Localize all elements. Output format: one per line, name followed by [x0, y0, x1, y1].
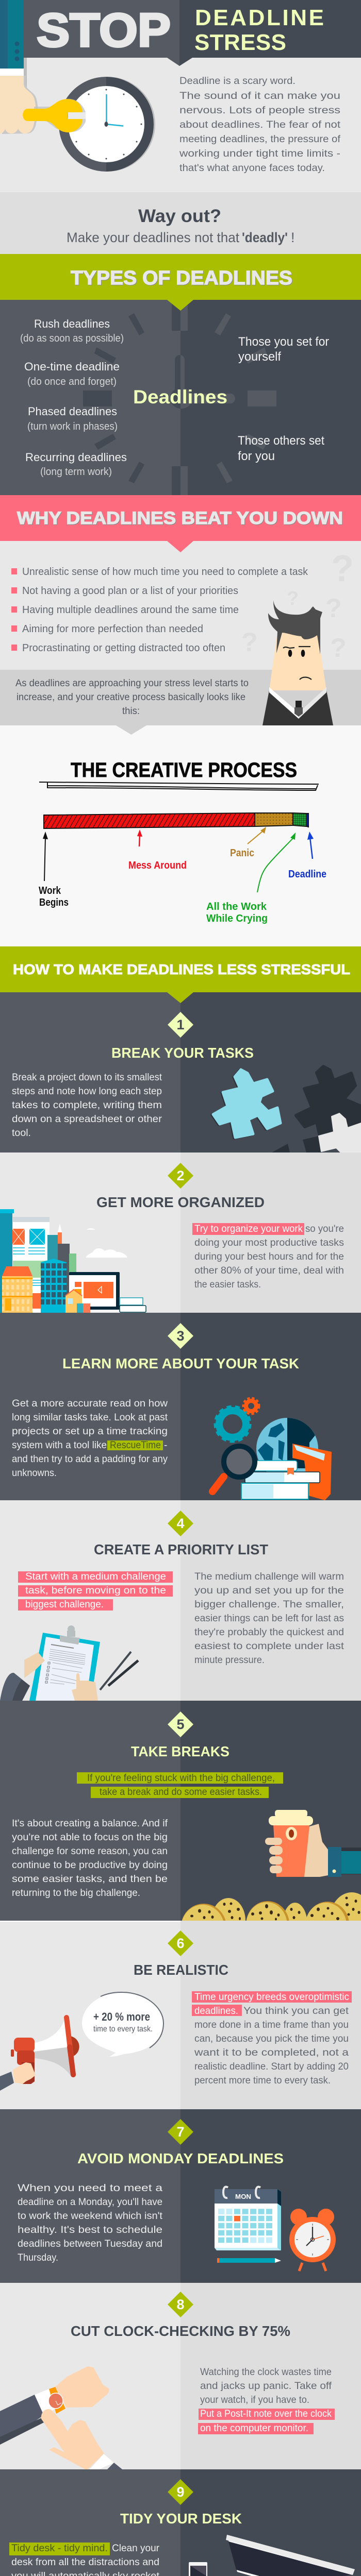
icon: calendar: MON	[235, 2193, 251, 2200]
text block: tip 6: percent more time to every task.	[194, 2075, 331, 2086]
heading: avoid monday: AVOID MONDAY DEADLINES	[77, 2150, 284, 2166]
heading: create a priority list: CREATE A PRIORITY LIST	[94, 1541, 268, 1557]
icon: cookies	[182, 1892, 361, 1921]
labels: timeline	[39, 848, 326, 924]
heading: break your tasks: BREAK YOUR TASKS	[111, 1045, 254, 1061]
icon: clock	[59, 77, 155, 172]
text block: tip 3: unknowns.	[12, 1468, 57, 1479]
icon: question marks: ?	[331, 548, 354, 589]
text: deadlines center label: Deadlines	[133, 386, 227, 408]
text block: intro: nervous. Lots of people stress	[179, 105, 340, 116]
heading: the creative process: THE CREATIVE PROCESS	[71, 759, 297, 782]
text block: intro: that's what anyone faces today.	[179, 163, 325, 174]
callout: feeling stuck: If you're feeling stuck with the big challenge,	[87, 1773, 275, 1784]
badge: 4: 4	[176, 1516, 185, 1531]
icon: calendar	[215, 2187, 281, 2250]
badge: 7: 7	[176, 2124, 185, 2140]
list: deadline kinds by duration: (turn work in phases)	[27, 421, 118, 432]
list: deadline kinds by duration: One-time deadline	[24, 360, 120, 373]
text block: tip 6	[192, 1991, 352, 2086]
text block: tip 5: some easier tasks, and then be	[12, 1874, 168, 1885]
panel: header banner	[0, 0, 361, 58]
text block: tip 5: challenge for some reason, you can	[12, 1846, 168, 1857]
callout: feeling stuck: take a break and do some easier tasks.	[100, 1787, 262, 1798]
text block: stress level: this:	[122, 706, 140, 717]
text block: tip 3: RescueTime	[110, 1440, 161, 1451]
text block: tip 7: to work the weekend which isn't	[18, 2211, 163, 2222]
text block: tip 3: -	[164, 1440, 167, 1451]
text block: tip 8: your watch, if you have to.	[200, 2395, 309, 2405]
badge: 2: 2	[176, 1168, 185, 1183]
text block: tip 9: Tidy desk - tidy mind.	[11, 2543, 108, 2554]
text block: tip 9: desk from all the distractions and	[11, 2557, 159, 2568]
text block: tip 5	[12, 1818, 168, 1899]
callout: start with a medium challenge: task, before moving on to the	[25, 1585, 166, 1596]
text block: stress level	[15, 678, 249, 717]
text block: intro: Deadline is a scary word.	[179, 76, 296, 87]
heading: way out: Way out?	[138, 206, 221, 226]
text block: tip 6: deadlines.	[194, 2006, 238, 2016]
panel: intro	[0, 0, 361, 192]
list: reasons	[11, 566, 308, 654]
panel: stress level note	[0, 600, 361, 725]
labels: timeline: While Crying	[206, 913, 268, 924]
text block: tip 3: long similar tasks take. Look at past	[12, 1412, 168, 1423]
badge: 6	[168, 1930, 193, 1956]
list: deadline kinds by duration: Recurring deadlines	[25, 451, 127, 464]
labels: timeline: Mess Around	[128, 860, 187, 871]
icon: question marks: ?	[325, 594, 342, 623]
arrow: mess around	[137, 829, 142, 846]
callout: feeling stuck	[77, 1772, 283, 1798]
panel: the creative process	[0, 725, 361, 946]
text block: tip 8: on the computer monitor.	[200, 2423, 308, 2434]
title: deadline: DEADLINE	[195, 5, 324, 30]
text block: tip 4: The medium challenge will warm	[194, 1571, 344, 1582]
list: deadline kinds by owner: Those you set for	[238, 335, 329, 349]
text block: intro: The sound of it can make you	[179, 91, 340, 101]
callout: start with a medium challenge: Start with a medium challenge	[25, 1571, 166, 1582]
icon: hand with coffee cup	[265, 1810, 361, 1877]
callout: start with a medium challenge: biggest challenge.	[25, 1599, 104, 1610]
text block: tip 8: Put a Post-It note over the clock	[200, 2409, 332, 2419]
icon: sleeve and hand with wrench	[0, 0, 86, 134]
heading: take breaks: TAKE BREAKS	[131, 1743, 229, 1759]
heading: be realistic: BE REALISTIC	[134, 1962, 228, 1978]
text block: tip 2: other 80% of your time, deal with	[194, 1265, 344, 1276]
arrow: deadline	[307, 832, 314, 859]
text block: tip 8: and jacks up panic. Take off	[200, 2381, 332, 2392]
badge: 1: 1	[176, 1017, 185, 1032]
icon: question marks: ?	[287, 588, 299, 609]
decoration: underline strokes	[39, 782, 319, 790]
callout: speech bubble 20 percent: time to every task.	[93, 2025, 153, 2033]
heading: how to: HOW TO MAKE DEADLINES LESS STRESSFUL	[13, 961, 350, 977]
badge: 8: 8	[176, 2297, 185, 2312]
icon: clipboard with hands and pens	[0, 1625, 138, 1701]
icon: worried man	[262, 600, 333, 725]
arrow: all the work	[257, 833, 296, 892]
text block: tip 1: tool.	[12, 1128, 31, 1139]
badge: 3: 3	[176, 1328, 185, 1344]
text block: tip 6: can, because you pick the time you	[194, 2033, 349, 2044]
icon: desk with monitor phone keyboard	[189, 2535, 361, 2576]
text block: tip 2: the easier tasks.	[194, 1279, 261, 1290]
chart: clock face of deadlines	[83, 300, 276, 495]
icon: question marks	[241, 548, 354, 663]
text block: tip 1: steps and note how long each step	[12, 1086, 162, 1097]
text block: tip 3: Get a more accurate read on how	[12, 1398, 168, 1409]
panel: way out	[0, 192, 361, 254]
icon: megaphone	[0, 2017, 79, 2091]
list: deadline kinds by duration	[20, 317, 127, 478]
panel: tip 4 create a priority list	[0, 1500, 361, 1701]
panel: tip 6 be realistic	[0, 1921, 361, 2109]
panel: tip 5 take breaks	[0, 1701, 361, 1921]
text block: tip 1: Break a project down to its smallest	[12, 1072, 162, 1083]
badge: 9: 9	[176, 2484, 185, 2500]
text block: tip 2	[192, 1223, 344, 1290]
panel: tip 1 break your tasks	[0, 992, 361, 1153]
text block: tip 1: down on a spreadsheet or other	[12, 1114, 162, 1125]
text block: intro: meeting deadlines, the pressure of	[179, 134, 341, 145]
text block: tip 9	[9, 2543, 160, 2576]
badge: 3	[168, 1323, 193, 1349]
list: deadline kinds by duration: (do once and forget)	[27, 376, 117, 387]
text block: tip 4	[194, 1571, 344, 1666]
text block: tip 4: easier things can be left for last as	[194, 1613, 344, 1624]
text block: tip 5: returning to the big challenge.	[12, 1888, 140, 1899]
heading: why deadlines: WHY DEADLINES BEAT YOU DOWN	[17, 509, 343, 528]
list: reasons: Procrastinating or getting distracted too often	[22, 642, 225, 654]
text: make your deadlines: Make your deadlines not that	[67, 230, 239, 245]
labels: timeline: Panic	[230, 848, 254, 859]
text block: tip 3: and then try to add a padding for any	[12, 1454, 168, 1465]
labels: timeline: Work	[39, 885, 61, 896]
badge: 5: 5	[176, 1717, 185, 1732]
list: deadline kinds by owner: for you	[238, 449, 275, 463]
text block: tip 8	[198, 2367, 335, 2434]
text block: tip 2: so you're	[305, 1224, 344, 1234]
text block: intro: about deadlines. The fear of not	[179, 120, 341, 130]
title: stop: STOP	[37, 4, 171, 57]
badge: 1	[168, 1012, 193, 1038]
icon: puzzle pieces	[213, 1066, 361, 1153]
list: reasons: Aiming for more perfection than needed	[22, 623, 203, 635]
text block: tip 5: you're not able to focus on the big	[12, 1832, 168, 1843]
badge: 7	[168, 2119, 193, 2145]
text block: tip 9: Clean your	[112, 2543, 160, 2554]
text: exclamation: !	[291, 230, 295, 245]
labels: timeline: All the Work	[206, 901, 267, 912]
text block: tip 6: realistic deadline. Start by adding 20	[194, 2061, 349, 2072]
list: deadline kinds by owner	[238, 335, 329, 463]
list: deadline kinds by duration: (do as soon as possible)	[20, 333, 124, 344]
list: reasons: Not having a good plan or a list of your priorities	[22, 585, 238, 597]
badge: 5	[168, 1711, 193, 1737]
text block: intro	[179, 76, 341, 174]
text block: tip 6: You think you can get	[243, 2006, 349, 2016]
panel: why deadlines beat you down	[0, 495, 361, 670]
panel: how to make deadlines less stressful	[0, 946, 361, 992]
heading: learn more: LEARN MORE ABOUT YOUR TASK	[62, 1355, 299, 1371]
icon: question marks: ?	[330, 633, 347, 663]
text block: stress level: As deadlines are approaching your stress level starts to	[15, 678, 249, 689]
text block: tip 1	[12, 1072, 162, 1139]
labels: timeline: Deadline	[288, 869, 326, 880]
text block: tip 3: system with a tool like	[12, 1440, 107, 1451]
text block: tip 1: takes to complete, writing them	[12, 1100, 162, 1111]
text block: tip 4: easiest to complete under last	[194, 1641, 344, 1652]
list: deadline kinds by duration: Phased deadlines	[28, 405, 117, 418]
text block: tip 5: continue to be productive by doing	[12, 1860, 168, 1871]
icon: alarm clock	[289, 2209, 336, 2271]
text block: tip 7: Thursday.	[18, 2252, 58, 2263]
text block: tip 7: deadlines between Tuesday and	[18, 2239, 162, 2249]
badge: 6: 6	[176, 1936, 185, 1951]
panel: tip 8 cut clock-checking	[0, 2283, 361, 2469]
callout: speech bubble 20 percent	[82, 1992, 163, 2057]
badge: 2	[168, 1163, 193, 1189]
text block: tip 7	[18, 2183, 163, 2263]
list: deadline kinds by owner: Those others set	[238, 434, 324, 448]
text block: tip 4: they're probably the quickest and	[194, 1627, 344, 1638]
text block: tip 4: bigger challenge. The smaller,	[194, 1599, 344, 1610]
panel: tip 3 learn more about your task	[0, 1313, 361, 1500]
text: deadly: 'deadly'	[242, 230, 288, 245]
labels: timeline: Begins	[39, 897, 69, 908]
list: deadline kinds by duration: (long term work)	[40, 466, 112, 478]
text block: tip 4: minute pressure.	[194, 1655, 265, 1666]
text block: tip 6: want it to be completed, not a	[194, 2047, 349, 2058]
title: stress: STRESS	[194, 30, 286, 55]
icon: pencil	[217, 2258, 281, 2263]
icon: hands and wristwatch	[0, 2366, 122, 2469]
icon: city of work tools	[0, 1209, 146, 1313]
text block: tip 7: deadline on a Monday, you'll have	[18, 2197, 162, 2208]
heading: cut clock-checking: CUT CLOCK-CHECKING BY 75%	[71, 2323, 290, 2339]
list: deadline kinds by duration: Rush deadlines	[34, 317, 110, 330]
panel: tip 2 get more organized	[0, 1153, 361, 1313]
panel: tip 9 tidy your desk	[0, 2469, 361, 2576]
text block: tip 2: during your best hours and for the	[194, 1251, 344, 1262]
heading: types of deadlines: TYPES OF DEADLINES	[71, 267, 292, 289]
arrow: work begins	[43, 832, 48, 881]
panel: tip 7 avoid monday deadlines	[0, 2109, 361, 2283]
text block: tip 3: projects or set up a time tracking	[12, 1426, 168, 1437]
heading: tidy your desk: TIDY YOUR DESK	[120, 2511, 242, 2527]
text block: tip 7: healthy. It's best to schedule	[18, 2225, 162, 2235]
text block: tip 4: you up and set you up for the	[194, 1585, 344, 1596]
badge: 9	[168, 2479, 193, 2505]
text block: tip 2: doing your most productive tasks	[194, 1238, 344, 1248]
badge: 4	[168, 1511, 193, 1536]
text block: tip 6: Time urgency breeds overoptimistic	[194, 1992, 349, 2003]
list: reasons: Unrealistic sense of how much time you need to complete a task	[22, 566, 308, 578]
icon: gears globe books magnifier	[212, 1398, 332, 1500]
text block: tip 8: Watching the clock wastes time	[200, 2367, 332, 2378]
text block: tip 5: It's about creating a balance. And if	[12, 1818, 168, 1829]
list: reasons: Having multiple deadlines around the same time	[22, 604, 239, 616]
text block: tip 6: more done in a time frame than you	[194, 2020, 349, 2030]
callout: speech bubble 20 percent: + 20 % more	[93, 2010, 150, 2023]
heading: get more organized: GET MORE ORGANIZED	[96, 1194, 265, 1210]
text block: tip 3	[12, 1398, 168, 1479]
chart: timeline bar	[44, 813, 308, 828]
text block: tip 7: When you need to meet a	[18, 2183, 163, 2194]
badge: 8	[168, 2292, 193, 2317]
text block: intro: working under tight time limits -	[179, 148, 340, 159]
callout: start with a medium challenge	[18, 1571, 173, 1611]
text block: stress level: increase, and your creative process basically looks like	[17, 692, 245, 703]
arrow: panic	[248, 827, 266, 844]
text block: tip 2: Try to organize your work	[194, 1224, 303, 1234]
panel: types of deadlines	[0, 254, 361, 495]
list: deadline kinds by owner: yourself	[238, 350, 281, 364]
icon: question marks: ?	[241, 628, 258, 657]
